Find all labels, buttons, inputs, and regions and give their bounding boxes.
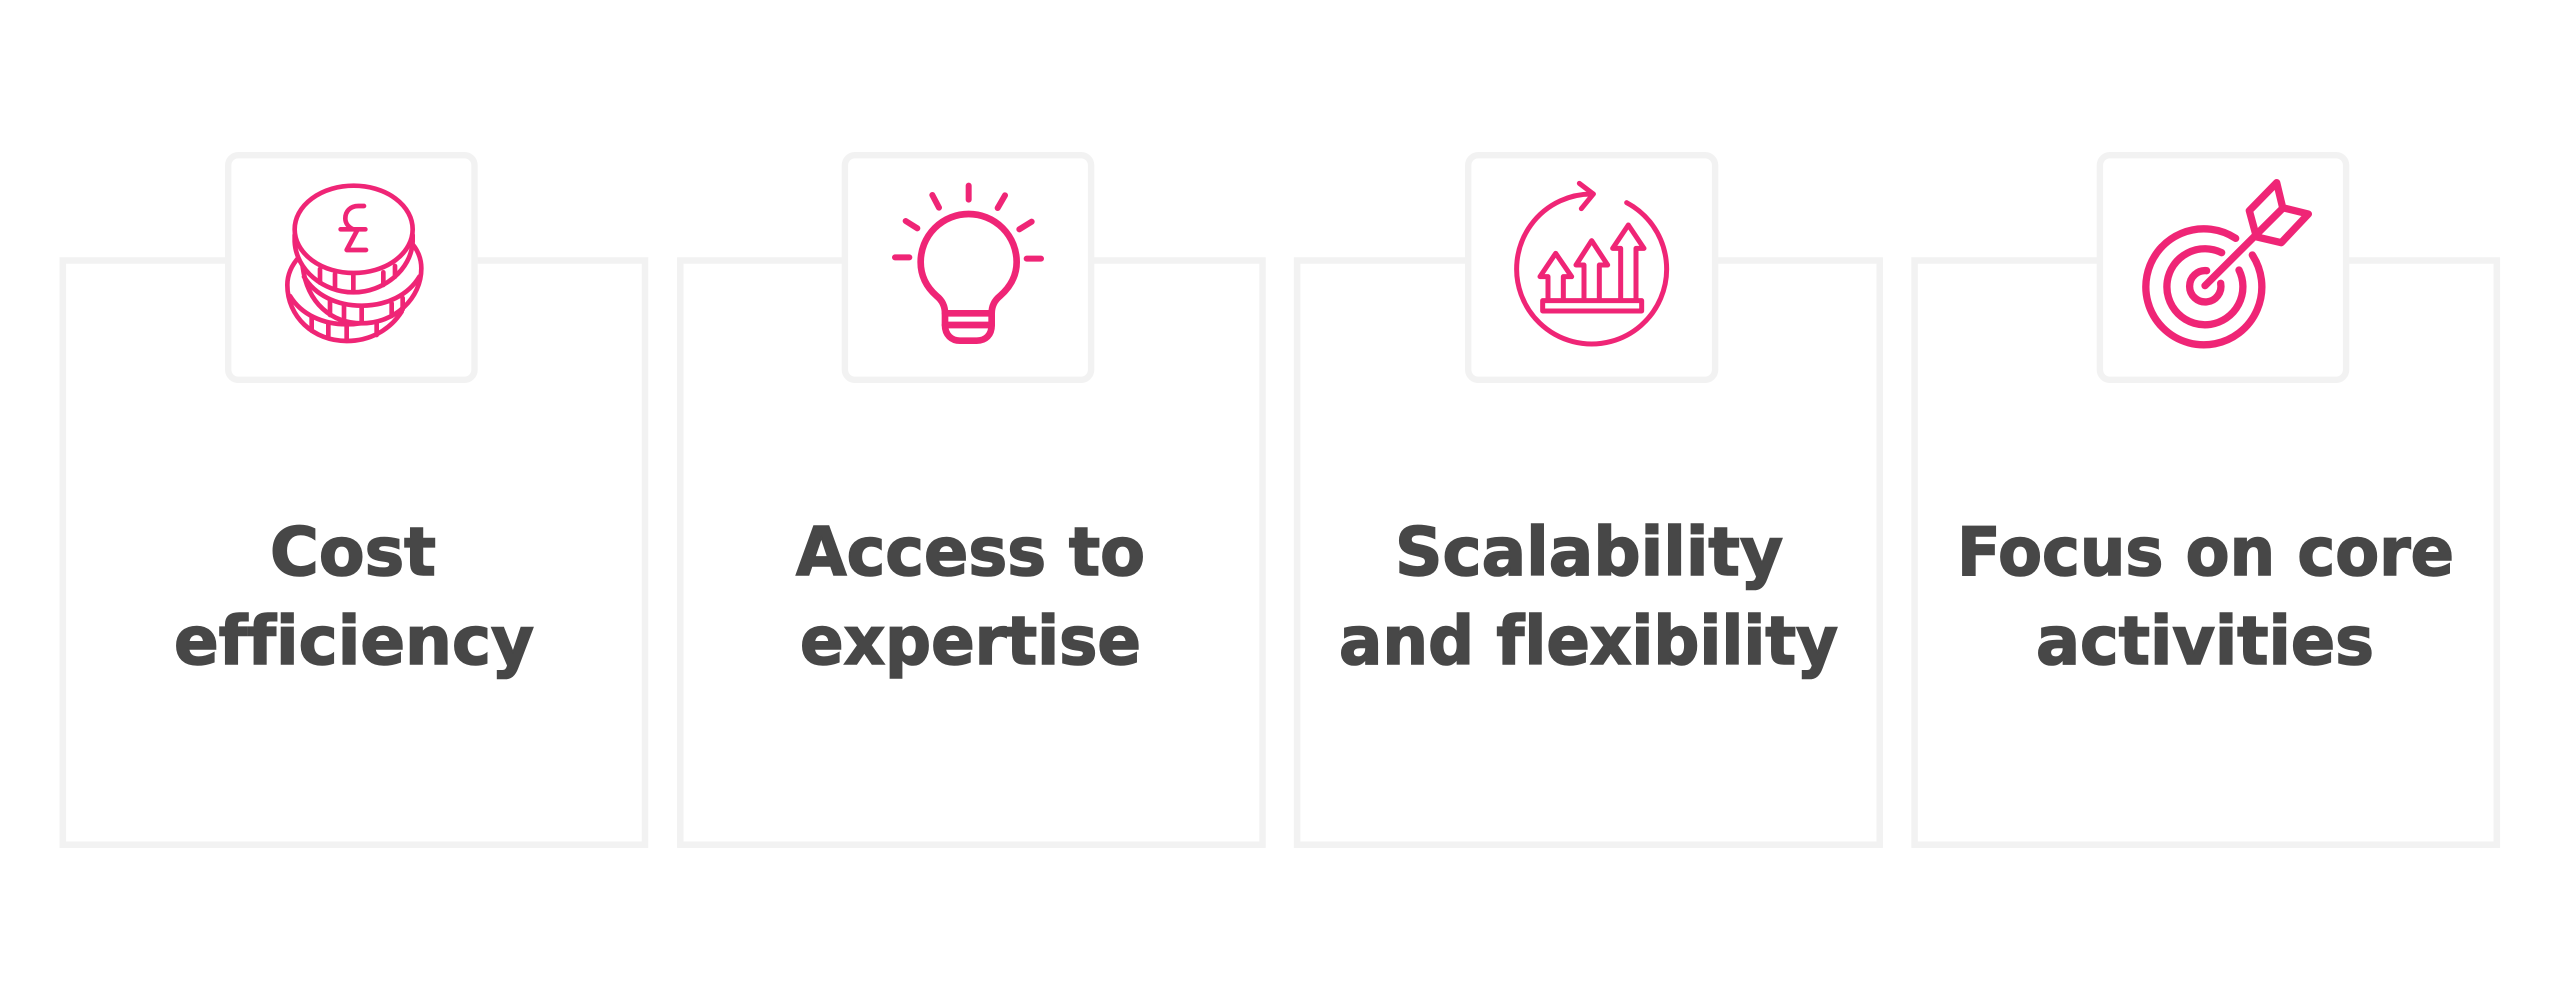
panel frame [1297,260,1880,845]
heading: scalability and flexibility: and flexibility [1339,602,1838,680]
heading: focus on core activities [1957,513,2454,680]
panel: cost efficiency [63,155,645,845]
panel frame [63,260,645,845]
panel: scalability and flexibility [1297,155,1880,845]
heading: access to expertise [796,513,1145,680]
icon: light bulb [895,186,1041,341]
heading: access to expertise: Access to [796,513,1145,591]
heading: cost efficiency: Cost [270,513,436,591]
heading: cost efficiency [174,513,534,680]
icon: pound coins [287,186,421,341]
icon box [845,155,1091,380]
heading: cost efficiency: efficiency [174,602,534,680]
icon box [1468,155,1715,380]
panel: focus on core activities [1915,155,2497,845]
heading: focus on core activities: Focus on core [1957,513,2454,591]
panel frame [1915,260,2497,845]
icon: target and arrow [2146,183,2308,345]
icon box [228,155,474,380]
heading: scalability and flexibility [1339,513,1838,680]
heading: access to expertise: expertise [800,602,1141,680]
panel: access to expertise [680,155,1262,845]
panel frame [680,260,1262,845]
icon: growth arrows in a circular arrow [1517,183,1667,344]
icon box [2100,155,2346,380]
heading: scalability and flexibility: Scalability [1395,513,1783,591]
heading: focus on core activities: activities [2036,602,2374,680]
